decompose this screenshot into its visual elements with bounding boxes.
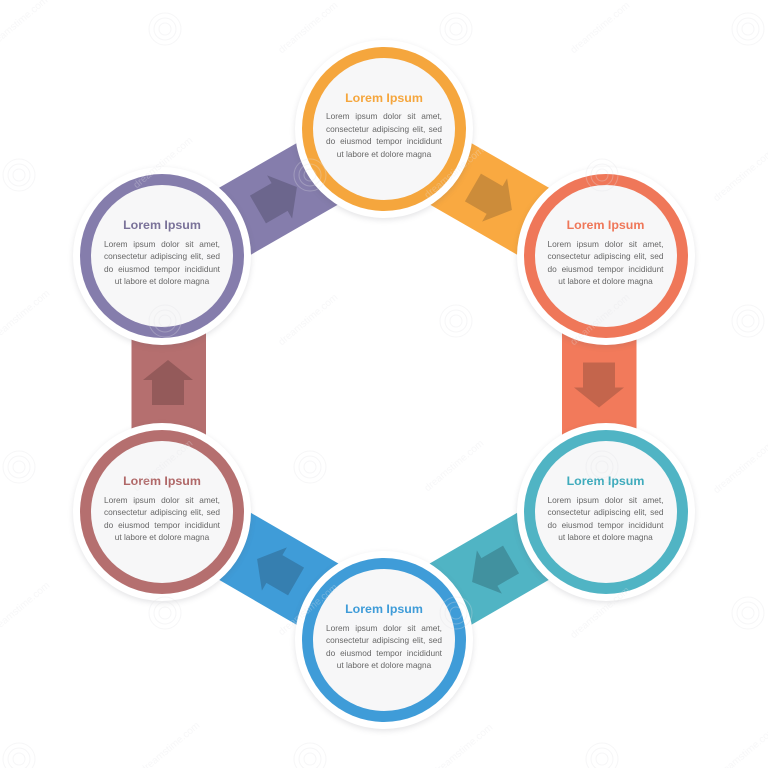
heading: red: Lorem Ipsum bbox=[567, 218, 644, 232]
panel: red circle bbox=[516, 167, 694, 345]
arrow: teal to blue bbox=[460, 538, 524, 604]
text block: purple: Lorem ipsum dolor sit amet, bbox=[104, 238, 220, 248]
text block: red bbox=[548, 238, 664, 286]
text block: orange: Lorem ipsum dolor sit amet, bbox=[326, 111, 442, 121]
text block: teal: Lorem ipsum dolor sit amet, bbox=[548, 494, 664, 504]
text block: orange: consectetur adipiscing elit, sed bbox=[326, 124, 442, 134]
band: teal connector bbox=[415, 481, 609, 636]
text block: purple: consectetur adipiscing elit, sed bbox=[104, 251, 220, 261]
arrow: purple to orange bbox=[245, 165, 309, 231]
panel: teal circle bbox=[516, 423, 694, 601]
watermark pattern: dreamstime.com bbox=[132, 135, 195, 191]
text block: orange: do eiusmod tempor incididunt bbox=[326, 136, 442, 146]
text block: red: Lorem ipsum dolor sit amet, bbox=[548, 238, 664, 248]
arrow: brown to purple bbox=[143, 360, 193, 405]
text block: red: ut labore et dolore magna bbox=[558, 276, 653, 286]
text block: brown: ut labore et dolore magna bbox=[115, 532, 209, 542]
text block: brown: do eiusmod tempor incididunt bbox=[104, 520, 220, 530]
text block: blue bbox=[326, 622, 442, 670]
text block: orange: ut labore et dolore magna bbox=[337, 148, 431, 158]
text block: purple: ut labore et dolore magna bbox=[115, 276, 209, 286]
heading: brown: Lorem Ipsum bbox=[123, 474, 201, 488]
band: purple connector bbox=[196, 132, 353, 265]
arrow: red to teal bbox=[574, 362, 624, 408]
text block: teal: do eiusmod tempor incididunt bbox=[548, 520, 664, 530]
band: blue connector bbox=[159, 481, 353, 636]
text block: teal: consectetur adipiscing elit, sed bbox=[548, 507, 664, 517]
text block: purple: do eiusmod tempor incididunt bbox=[104, 264, 220, 274]
text block: brown: Lorem ipsum dolor sit amet, bbox=[104, 494, 220, 504]
heading: blue: Lorem Ipsum bbox=[345, 602, 423, 616]
text block: red: do eiusmod tempor incididunt bbox=[548, 264, 664, 274]
watermark pattern: dreamstime.com bbox=[423, 438, 486, 494]
text block: blue: consectetur adipiscing elit, sed bbox=[326, 635, 442, 645]
watermark pattern: dreamstime.com bbox=[569, 292, 632, 348]
panel: blue circle bbox=[295, 551, 473, 729]
watermark pattern: dreamstime.com bbox=[132, 438, 195, 494]
text block: blue: do eiusmod tempor incididunt bbox=[326, 648, 442, 658]
band: red connector bbox=[562, 320, 636, 445]
panel: orange circle bbox=[295, 40, 473, 218]
watermark pattern: dreamstime.com bbox=[277, 0, 340, 56]
text block: brown bbox=[104, 494, 220, 542]
text block: orange bbox=[326, 111, 442, 158]
text block: blue: Lorem ipsum dolor sit amet, bbox=[326, 622, 442, 632]
text block: teal bbox=[548, 494, 664, 542]
watermark pattern: dreamstime.com bbox=[423, 145, 486, 201]
text block: red: consectetur adipiscing elit, sed bbox=[548, 251, 664, 261]
heading: orange: Lorem Ipsum bbox=[345, 90, 423, 104]
text block: purple bbox=[104, 238, 220, 286]
text block: teal: ut labore et dolore magna bbox=[558, 532, 653, 542]
heading: purple: Lorem Ipsum bbox=[123, 218, 201, 232]
text block: blue: ut labore et dolore magna bbox=[337, 660, 431, 670]
band: orange connector bbox=[415, 132, 572, 265]
band: brown connector bbox=[132, 320, 206, 445]
arrow: orange to red bbox=[460, 166, 524, 232]
watermark pattern: dreamstime.com bbox=[569, 585, 632, 641]
panel: purple circle bbox=[73, 167, 251, 345]
watermark pattern: dreamstime.com bbox=[277, 292, 340, 348]
watermark pattern: dreamstime.com bbox=[277, 582, 340, 638]
arrow: blue to brown bbox=[245, 537, 309, 603]
watermark pattern: dreamstime.com bbox=[569, 0, 632, 56]
panel: brown circle bbox=[73, 423, 251, 601]
text block: brown: consectetur adipiscing elit, sed bbox=[104, 507, 220, 517]
heading: teal: Lorem Ipsum bbox=[567, 474, 644, 488]
